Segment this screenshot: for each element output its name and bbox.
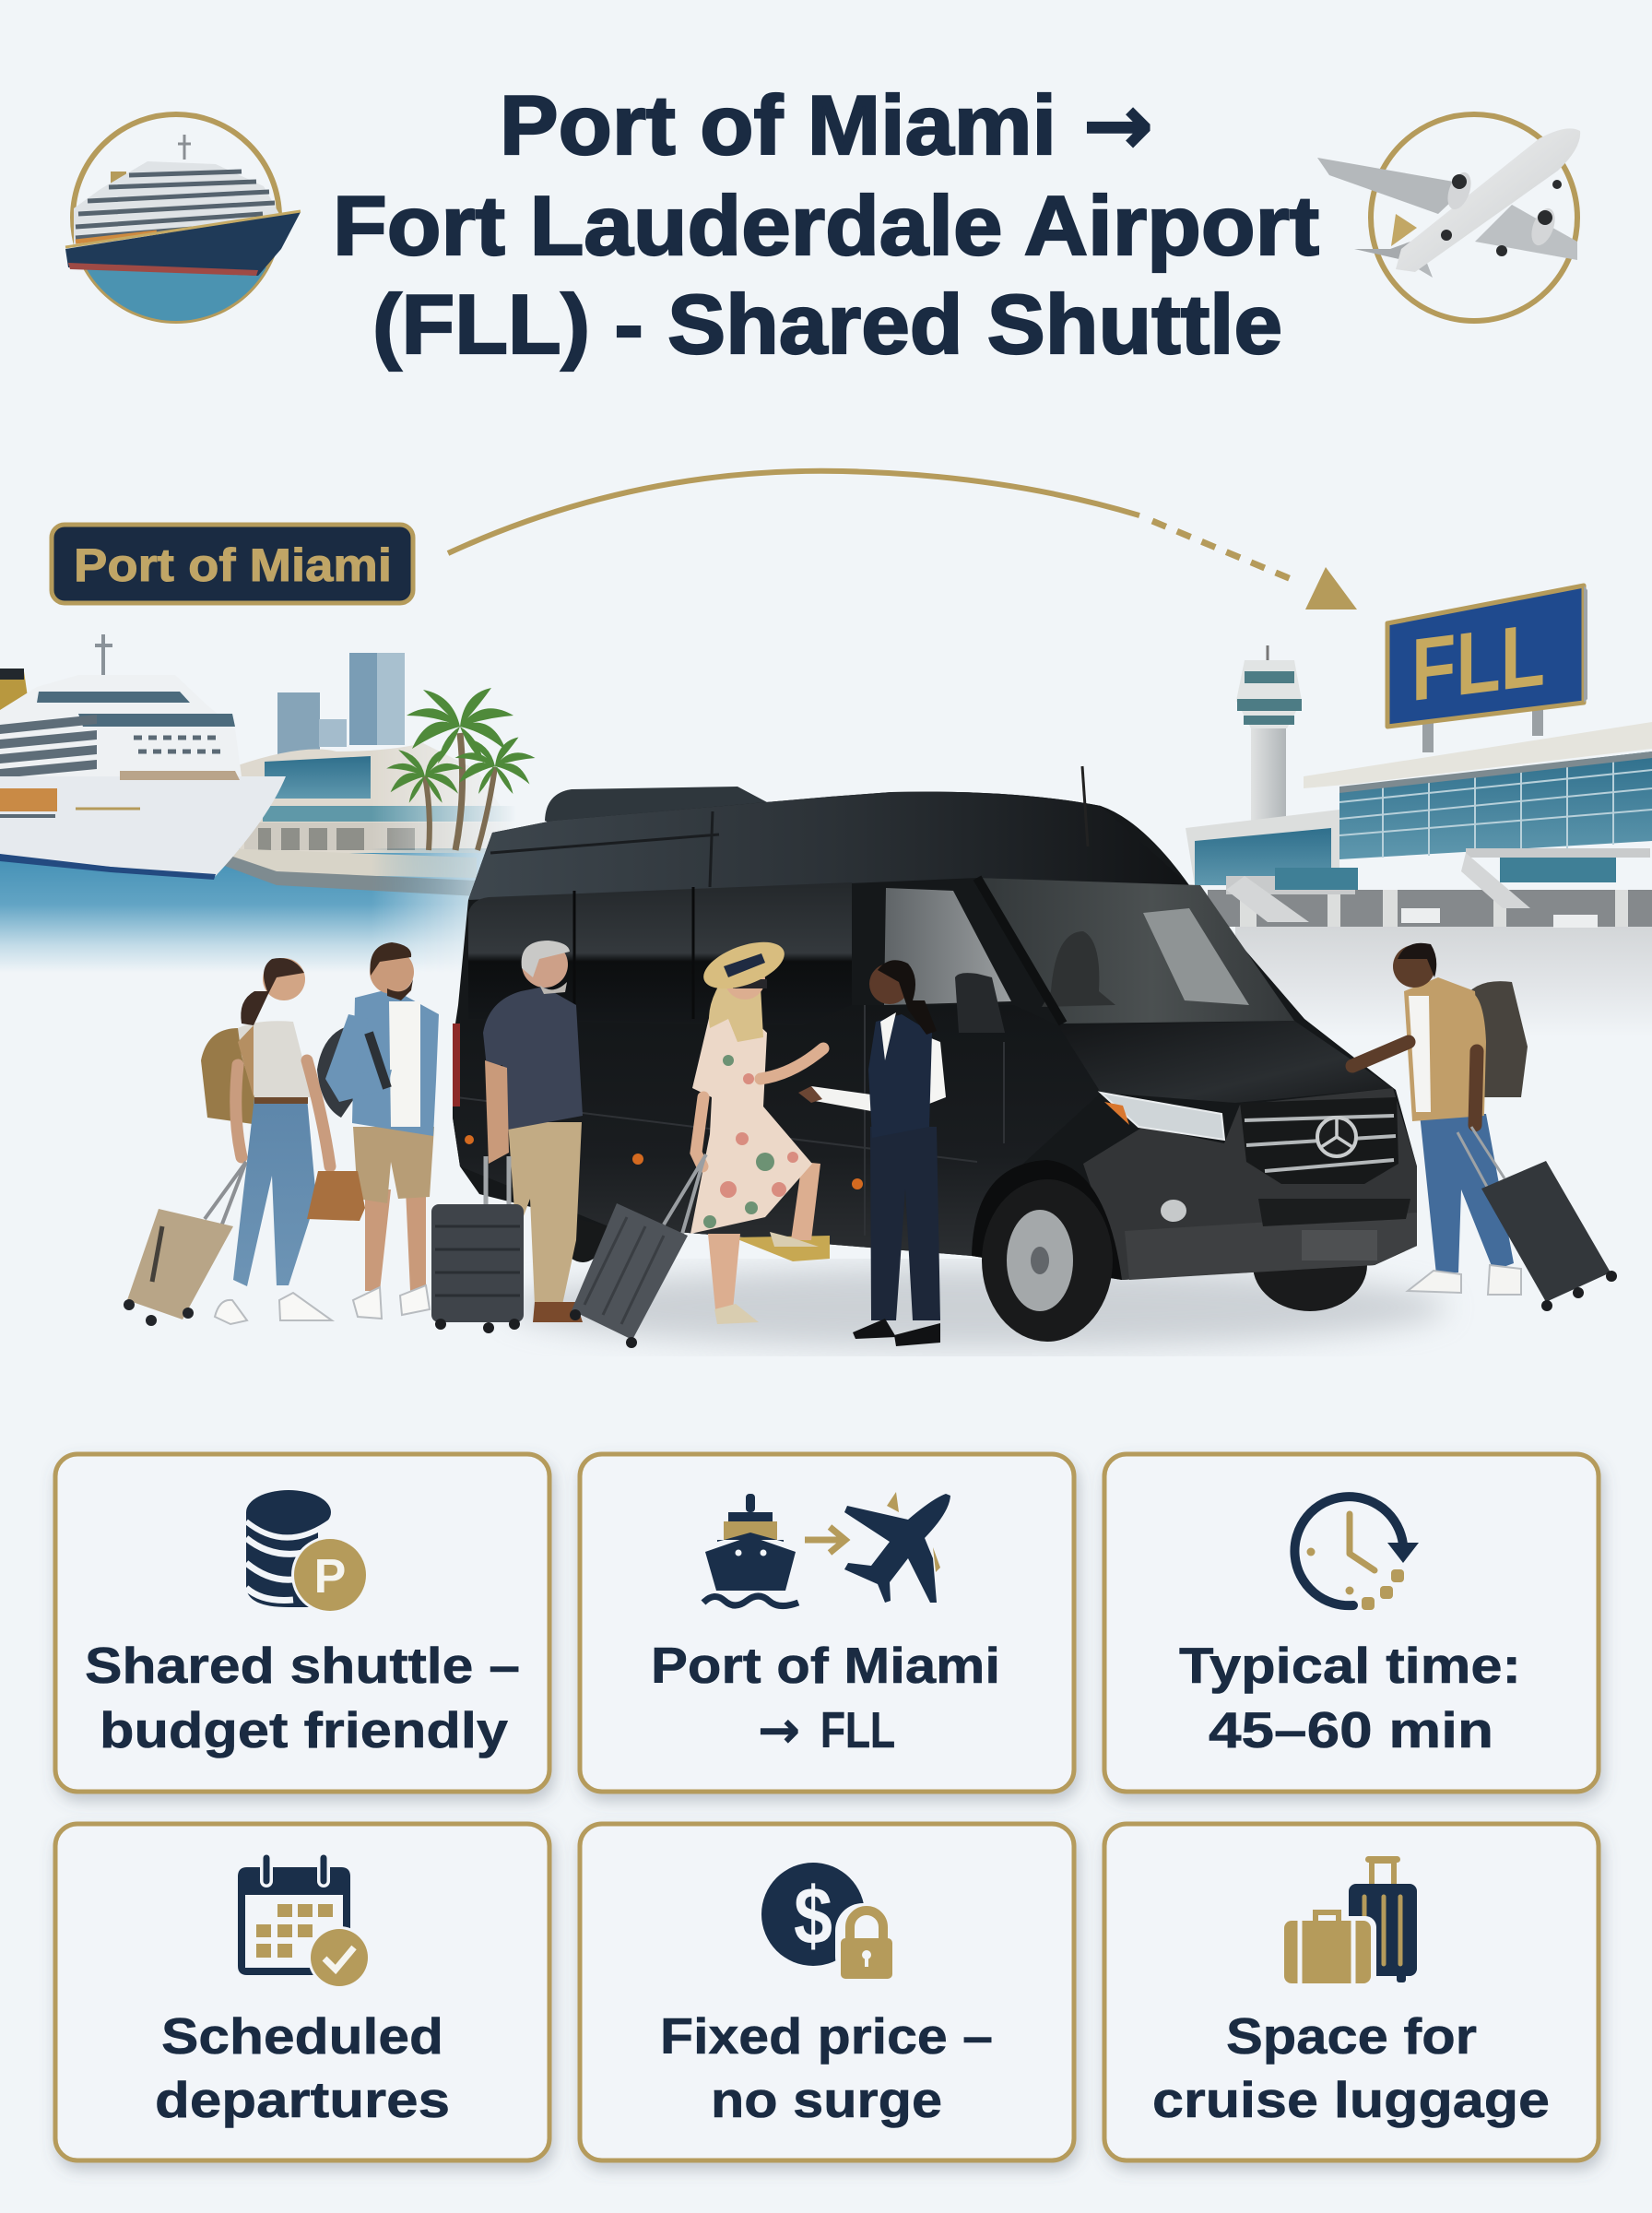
label: cruise luggage [1152,2071,1550,2128]
jet bridges and base [1208,848,1652,928]
label: Port of Miami pill: Port of Miami [74,539,392,591]
black suitcase [1457,1127,1617,1311]
roof pod [545,787,767,822]
title [333,77,1319,372]
panel: typical time [1104,1454,1599,1792]
person: shuttle attendant [798,960,946,1346]
palm trees [386,688,535,850]
icon: coin stack [246,1490,369,1614]
label: 45–60 min [1209,1701,1493,1758]
label [660,2007,993,2128]
driver window [884,888,1011,1005]
water [0,848,516,973]
boarding step [733,1236,830,1261]
icon: ship to plane [703,1492,950,1606]
label: → [758,1700,800,1759]
label: departures [155,2071,450,2128]
brown bag [307,1171,365,1221]
title: (FLL) - Shared Shuttle [372,278,1282,372]
person: woman with tan suitcase [124,958,332,1326]
label: Fixed price – [660,2007,993,2065]
label: Shared shuttle – [85,1637,520,1694]
label: Space for [1226,2007,1477,2065]
hood [1058,1021,1393,1103]
body [453,792,1417,1280]
terminal low wing [1186,810,1339,885]
cruise ship [0,634,286,880]
title: Fort Lauderdale Airport [333,180,1319,273]
person: woman in floral dress [570,933,823,1348]
grille [1240,1097,1398,1184]
tan suitcase [124,1162,246,1326]
icon: cruise ship medallion [65,114,301,321]
icon: clock [1294,1497,1419,1610]
icon: coin stack: P [314,1550,346,1604]
shuttle van [453,766,1417,1342]
windshield [977,878,1294,1024]
scene: port of Miami [0,634,535,973]
control tower [1236,645,1302,821]
scene: FLL airport [1186,586,1652,1037]
front wheel [972,1160,1122,1342]
black suitcase [431,1156,524,1333]
label: FLL [820,1701,895,1758]
far front wheel [1253,1219,1367,1311]
title: Port of Miami [500,79,1056,172]
arrow: route from port to FLL [448,471,1357,609]
rear wheel [551,1144,614,1262]
person: man at front of van [1352,943,1617,1311]
label [1152,2007,1550,2128]
icon: dollar and lock: $ [794,1870,832,1961]
skyline [277,653,405,757]
antenna [1082,766,1088,846]
label: Scheduled [161,2007,443,2065]
ground shadow [507,1267,1447,1348]
label: no surge [711,2071,942,2128]
headlight [1101,1093,1224,1140]
icon: calendar with check [238,1858,371,1989]
panel: fixed price [580,1824,1074,2160]
label [651,1637,1000,1759]
label [85,1637,520,1758]
panel: cruise luggage [1104,1824,1599,2160]
FLL sign [1387,586,1587,752]
terminal building [222,743,516,896]
icon: dollar and lock [761,1863,898,1984]
panel: shared shuttle budget friendly [55,1454,549,1792]
person: man in navy polo [431,941,583,1333]
lower intake and plate [1258,1199,1410,1226]
front lower bodywork [1083,1088,1417,1280]
side door lower panel [453,1005,1101,1256]
label: Port of Miami pill [52,525,413,603]
tarmac [1235,922,1652,1037]
gray suitcase [570,1154,706,1348]
title: → [1083,77,1153,174]
mirror [955,973,1005,1033]
label [155,2007,450,2128]
label: Port of Miami [651,1637,1000,1694]
panel: Port of Miami to FLL [580,1454,1074,1792]
terminal main [1304,722,1652,859]
FLL sign: FLL [1411,606,1545,720]
label: budget friendly [100,1701,508,1758]
upper body panel [468,792,1189,900]
icon: airplane medallion [1317,114,1580,321]
panel: scheduled departures [55,1824,549,2160]
label: Typical time: [1179,1637,1521,1694]
side windows [468,882,852,1024]
icon: luggage [1279,1856,1417,1990]
label [1179,1637,1521,1758]
person: man in blue shirt [307,942,439,1319]
